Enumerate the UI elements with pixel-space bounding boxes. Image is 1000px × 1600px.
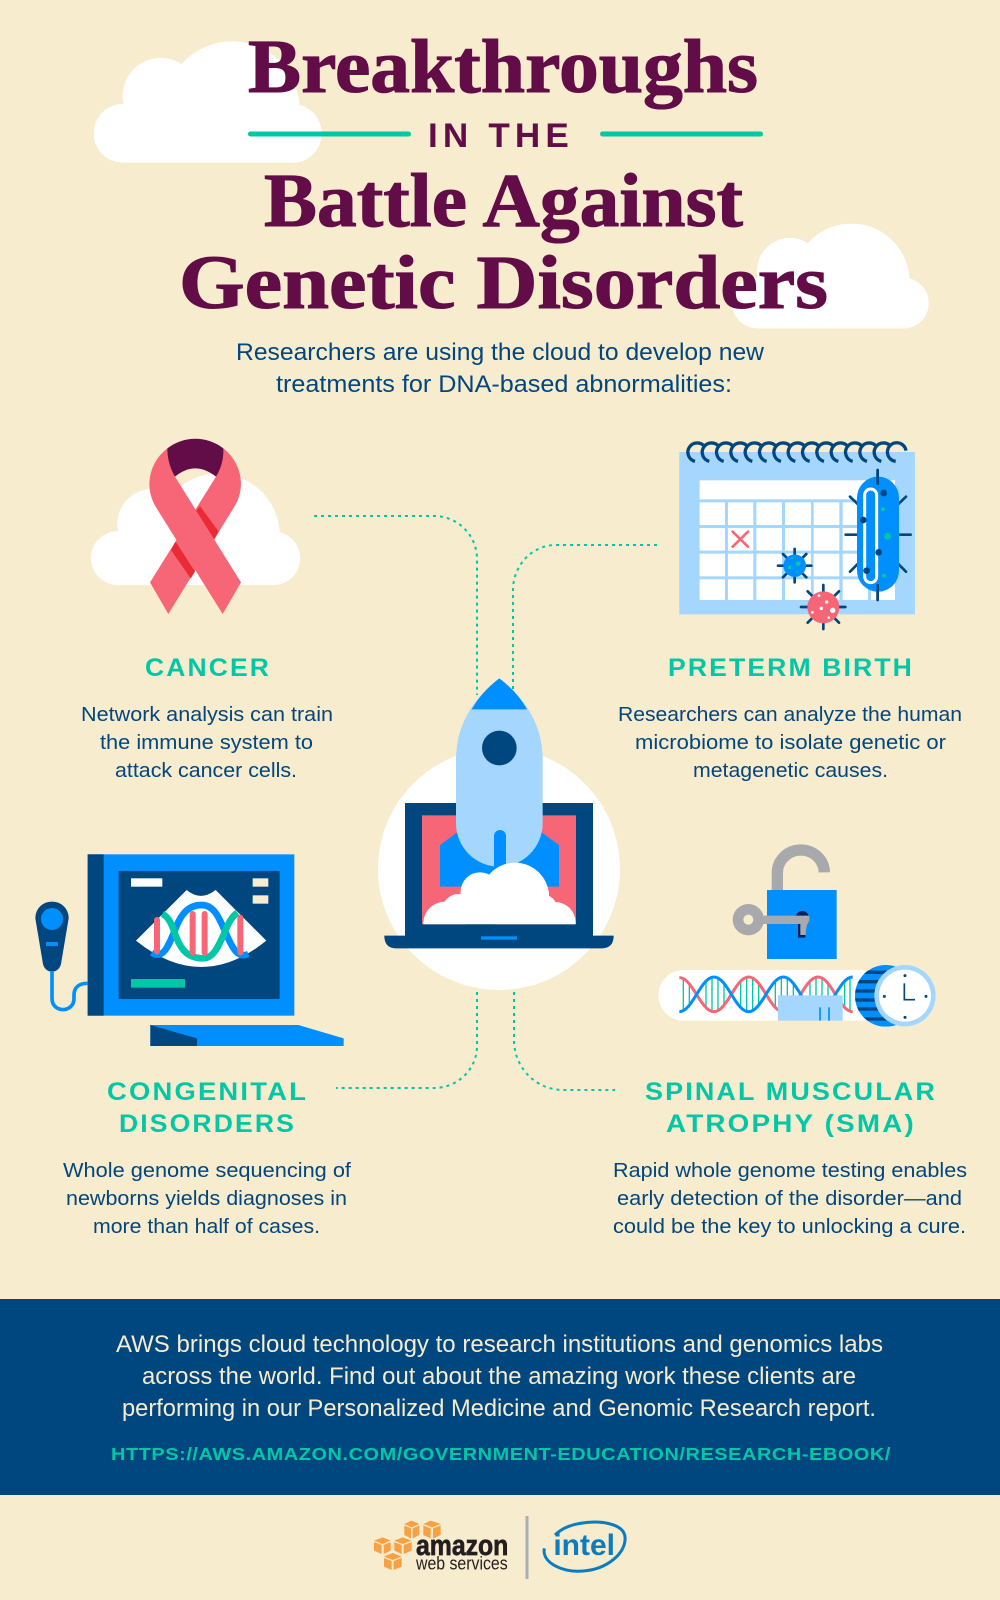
subtitle: Researchers are using the cloud to develop new: [236, 339, 765, 366]
text: congenital description: more than half of cases.: [93, 1215, 320, 1238]
section: congenital disorders: [63, 1078, 351, 1238]
blue virus: [778, 549, 811, 582]
red virus: [801, 585, 845, 629]
DNA strands: [152, 905, 248, 958]
bacterium: [846, 470, 911, 600]
rocket window: [482, 731, 517, 765]
banner link: HTTPS://AWS.AMAZON.COM/GOVERNMENT-EDUCATION/RESEARCH-EBOOK/: [111, 1444, 891, 1464]
icon: calendar with microbes: [679, 443, 915, 629]
subtitle: treatments for DNA-based abnormalities:: [276, 371, 732, 398]
rocket centre fin: [494, 830, 506, 873]
title rule left: [248, 132, 411, 136]
laptop slot: [481, 936, 517, 940]
icon: cancer ribbon on cloud: [91, 439, 300, 614]
icon: rocket launching from laptop: [378, 678, 620, 990]
heading: SMA: SPINAL MUSCULAR: [645, 1078, 937, 1106]
text: preterm description: Researchers can analyze the human: [618, 703, 962, 726]
white circle: [378, 748, 620, 990]
dotted connector lines: [314, 516, 657, 1090]
keyhole: [796, 911, 809, 938]
text: congenital description: [63, 1159, 351, 1238]
heading: congenital disorders: DISORDERS: [119, 1110, 296, 1138]
logo: intel: [544, 1522, 625, 1571]
probe: [35, 902, 88, 1010]
text: cancer description: Network analysis can train: [81, 703, 333, 726]
text: cancer description: the immune system to: [100, 731, 313, 754]
laptop screen: [405, 803, 593, 936]
title: [179, 25, 828, 325]
heading: congenital disorders: CONGENITAL: [107, 1078, 308, 1106]
rocket nose: [472, 678, 527, 709]
logo cubes: [374, 1521, 441, 1570]
cloud: title right: [732, 224, 929, 328]
text: SMA description: Rapid whole genome testing enables: [613, 1159, 967, 1182]
DNA strands: [679, 977, 853, 1012]
title line: Genetic Disorders: Genetic Disorders: [179, 241, 828, 325]
heading: SMA: ATROPHY (SMA): [666, 1110, 916, 1138]
section: spinal muscular atrophy: [613, 1078, 967, 1238]
heading: cancer: CANCER: [145, 654, 271, 682]
ultrasound fan: [136, 890, 266, 967]
logo: amazon web services: web services: [415, 1552, 508, 1573]
ribbon: [149, 439, 241, 614]
test tube box: [778, 995, 843, 1021]
cloud: title left: [94, 41, 322, 163]
monitor: [88, 854, 294, 1016]
banner: call to action: [0, 1299, 1000, 1495]
logo: amazon web services: [374, 1521, 508, 1573]
padlock shackle: [777, 850, 824, 892]
text: preterm description: [618, 703, 962, 782]
icon: padlock, key, DNA and clock: [658, 850, 936, 1027]
laptop base: [384, 936, 614, 948]
subtitle: [236, 339, 765, 398]
rocket body: [456, 678, 543, 867]
rocket fins: [440, 832, 559, 887]
key: [733, 904, 809, 935]
text: cancer description: [81, 703, 333, 782]
title rule right: [600, 132, 763, 136]
title line: Battle Against: Battle Against: [264, 159, 743, 243]
heading: preterm birth: PRETERM BIRTH: [668, 654, 914, 682]
clock face: [874, 965, 936, 1026]
banner text: AWS brings cloud technology to research institutions and genomics labs: [116, 1331, 883, 1358]
calendar grid: [700, 480, 895, 600]
banner text: [116, 1331, 883, 1422]
DNA rungs: [157, 914, 240, 953]
exhaust cloud: [423, 863, 576, 945]
logo wordmark: amazon: [416, 1530, 508, 1562]
screen: [119, 871, 280, 999]
logo: intel: intel: [553, 1529, 615, 1562]
heading: congenital disorders: [107, 1078, 308, 1138]
text: congenital description: Whole genome sequencing of: [63, 1159, 351, 1182]
keyboard: [150, 1025, 344, 1046]
cloud behind ribbon: [91, 474, 300, 585]
text: cancer description: attack cancer cells.: [115, 759, 297, 782]
section: cancer: [81, 654, 333, 782]
calendar spiral: [688, 443, 906, 461]
DNA capsule: [658, 970, 885, 1021]
text: SMA description: early detection of the disorder—and: [617, 1187, 962, 1210]
section: preterm birth: [618, 654, 962, 782]
title line: Breakthroughs: Breakthroughs: [248, 25, 758, 109]
banner text: performing in our Personalized Medicine and Genomic Research report.: [122, 1395, 876, 1422]
banner text: across the world. Find out about the amazing work these clients are: [142, 1363, 856, 1390]
icon: ultrasound machine with DNA: [35, 854, 344, 1046]
text: preterm description: microbiome to isolate genetic or: [635, 731, 946, 754]
logo divider: [526, 1516, 528, 1579]
text: congenital description: newborns yields diagnoses in: [66, 1187, 347, 1210]
padlock body: [767, 890, 837, 959]
text: preterm description: metagenetic causes.: [693, 759, 888, 782]
red x mark: [733, 532, 748, 547]
cloud cut at base: [420, 924, 580, 936]
calendar page: [679, 452, 915, 614]
heading: SMA: [645, 1078, 937, 1138]
text: SMA description: [613, 1159, 967, 1238]
text: SMA description: could be the key to unlocking a cure.: [613, 1215, 966, 1238]
title line: in the: IN THE: [428, 117, 574, 155]
